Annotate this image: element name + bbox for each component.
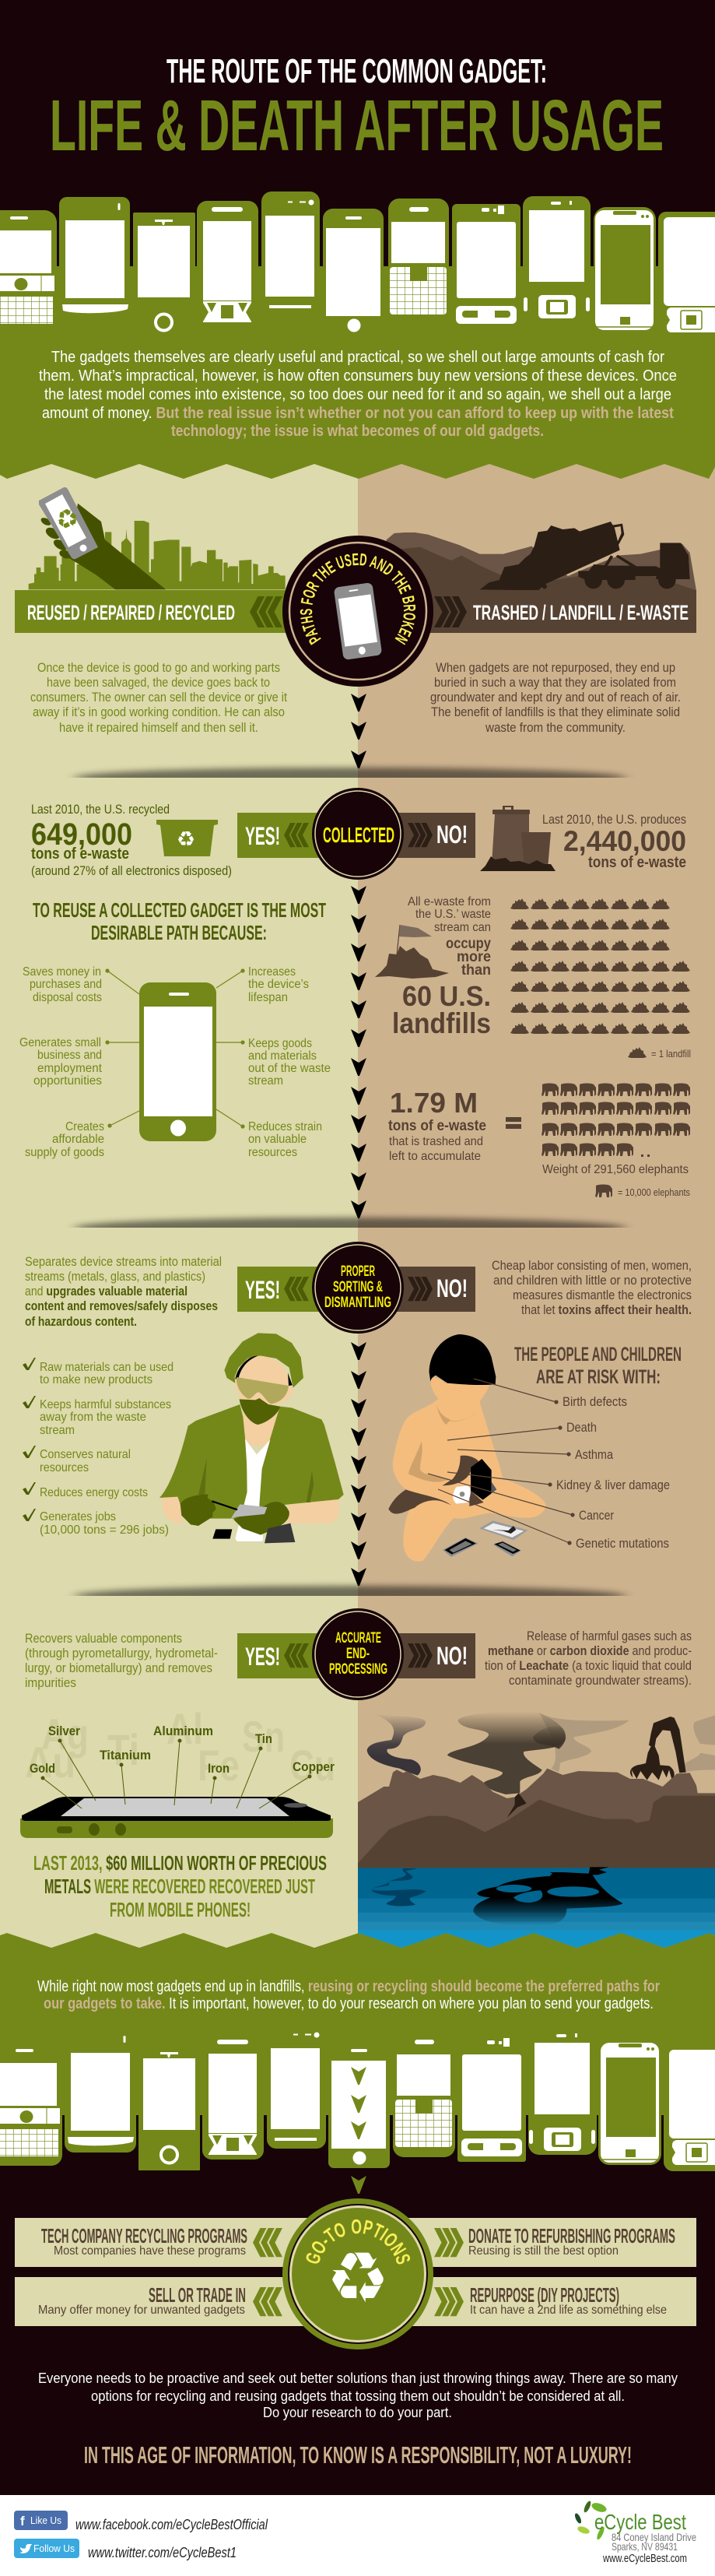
callouts: health risks: Kidney & liver damage <box>556 1478 670 1492</box>
option: sell or trade in <box>38 2283 246 2317</box>
benefit labels: purchases and <box>30 978 102 991</box>
twitter url: www.twitter.com/eCycleBest1 <box>88 2545 237 2560</box>
smoke reflection <box>371 1868 426 1906</box>
heading: people and children at risk: ARE AT RISK WITH: <box>536 1366 661 1388</box>
option: tech company recycling: TECH COMPANY RECYCLING PROGRAMS <box>41 2224 247 2247</box>
yes/no badge: proper sorting and dismantling: DISMANTLING <box>324 1295 391 1311</box>
text: reuse path description: Once the device is good to go and working parts <box>37 660 280 675</box>
heading: reuse is most desirable <box>33 898 326 944</box>
yes/no badge: collected: COLLECTED <box>323 823 394 847</box>
shadows under sections <box>74 768 626 1606</box>
pictogram: elephants <box>542 1084 690 1157</box>
arrow column <box>351 694 366 1586</box>
heading: people and children at risk <box>514 1344 682 1388</box>
faded element symbols: Al <box>166 1704 203 1753</box>
intro text: them. What’s impractical, however, is how often consumers buy new versions of these devices. Once <box>39 367 677 385</box>
diagram: metals in a phone <box>20 1724 335 1838</box>
text: reuse path description: have been salvaged, the device goes back to <box>47 675 270 690</box>
text: landfill capacity: than <box>461 962 491 979</box>
faded element symbols: Au <box>25 1738 75 1787</box>
facebook button: f <box>20 2514 25 2529</box>
icon: recycle bin <box>156 820 218 856</box>
checklist: benefits of proper sorting: Generates jobs <box>40 1510 116 1523</box>
metal labels: Titanium <box>100 1748 151 1762</box>
stat: produced: tons of e-waste <box>588 854 686 871</box>
benefit labels: stream <box>248 1074 283 1088</box>
callout: precious metals recovered: METALS WERE RECOVERED RECOVERED JUST <box>44 1875 315 1898</box>
benefit labels: Generates small <box>19 1036 101 1049</box>
text: proper sorting description: and upgrades valuable material <box>25 1284 188 1299</box>
panel: right tan column <box>358 459 715 1868</box>
text: landfill path description <box>430 660 681 735</box>
facebook button: Like Us <box>30 2514 61 2526</box>
icon: trash cans <box>480 806 556 871</box>
text: landfill capacity: more <box>457 949 491 965</box>
stat: recycled: 649,000 <box>31 817 132 852</box>
city skyline <box>16 521 286 589</box>
text: landfill path description: groundwater and kept dry and out of reach of air. <box>430 690 681 705</box>
text: landfill capacity: All e-waste from <box>408 895 491 908</box>
text: end-processing description: impurities <box>25 1675 76 1690</box>
intro text: the latest model comes into existence, so too does our need for it and so again, we shell out a large <box>44 386 671 403</box>
badge: go-to options: GO-TO OPTIONS <box>307 2219 411 2264</box>
icon: phone lying flat <box>20 1797 333 1838</box>
text: proper sorting description <box>25 1254 222 1329</box>
faded element symbols: Sn <box>242 1712 285 1761</box>
option: repurpose: It can have a 2nd life as something else <box>470 2304 667 2317</box>
top green band with phone row <box>0 192 715 479</box>
callout: precious metals recovered: LAST 2013, $60 MILLION WORTH OF PRECIOUS <box>33 1851 327 1875</box>
text: end-processing description: Recovers valuable components <box>25 1631 182 1646</box>
benefit labels: disposal costs <box>33 991 102 1004</box>
benefit labels: resources <box>248 1146 297 1159</box>
illustration: worker with protective gear <box>159 1333 344 1543</box>
legend: landfill <box>628 1047 691 1060</box>
checklist: benefits of proper sorting: to make new products <box>40 1373 152 1386</box>
equals sign <box>506 1117 521 1129</box>
benefit labels: Reduces strain <box>248 1120 322 1133</box>
text: end-processing description: lurgy, or biometallurgy) and removes <box>25 1661 212 1675</box>
yes/no badge: proper sorting and dismantling: PROPER <box>341 1263 375 1280</box>
checklist: benefits of proper sorting <box>23 1358 173 1537</box>
text: landfill path description: waste from the community. <box>485 720 626 735</box>
text: harmful gases description: tion of Leachate (a toxic liquid that could <box>485 1658 692 1673</box>
callouts: health risks: Death <box>566 1421 597 1435</box>
checklist: benefits of proper sorting: Conserves natural <box>40 1448 131 1461</box>
bottom phone screens and keys <box>0 2032 715 2165</box>
trashed path banner with landfill truck <box>358 522 696 633</box>
yes/no badge: proper sorting and dismantling <box>237 1242 475 1334</box>
text: proper sorting description: streams (metals, glass, and plastics) <box>25 1269 205 1284</box>
faded element symbols: Ti <box>107 1725 139 1774</box>
badge: paths for the used and the broken <box>282 536 433 687</box>
text: cheap labor description <box>492 1258 692 1317</box>
facebook button <box>14 2511 68 2530</box>
intro text: The gadgets themselves are clearly useful and practical, so we shell out large amounts of cash for <box>51 349 664 366</box>
metal labels: Aluminum <box>153 1724 213 1738</box>
benefit labels: affordable <box>52 1133 104 1146</box>
yes/no badge: accurate end-processing: NO! <box>436 1642 468 1670</box>
intro text: technology; the issue is what becomes of our old gadgets. <box>171 423 544 440</box>
connector lines <box>106 969 244 1128</box>
benefit labels: Keeps goods <box>248 1037 312 1050</box>
twitter button: Follow Us <box>33 2543 75 2554</box>
yes/no badge: collected: YES! <box>245 822 280 850</box>
yes/no badge: accurate end-processing: PROCESSING <box>329 1661 387 1678</box>
yes/no badge: accurate end-processing <box>237 1608 475 1700</box>
text: landfill capacity: the U.S.’ waste <box>415 908 491 921</box>
intro text <box>39 349 677 440</box>
callouts: health risks: Birth defects <box>563 1395 627 1409</box>
checklist: benefits of proper sorting: resources <box>40 1461 89 1474</box>
logo: www.eCycleBest.com <box>602 2552 687 2565</box>
logo: eCycle Best <box>594 2510 686 2534</box>
option: donate to refurbishing <box>468 2224 675 2258</box>
arrows into options <box>351 2067 366 2194</box>
checklist: benefits of proper sorting: Raw materials can be used <box>40 1361 173 1374</box>
caption: elephants: Weight of 291,560 elephants <box>542 1163 689 1176</box>
badge: paths for the used and the broken: PATHS FOR THE USED AND THE BROKEN <box>300 553 415 645</box>
benefit labels: opportunities <box>33 1074 102 1088</box>
closing text: Everyone needs to be proactive and seek out better solutions than just throwing things away. There are so many <box>38 2370 678 2386</box>
text: cheap labor description: that let toxins affect their health. <box>521 1302 692 1317</box>
yes/no badge: collected: NO! <box>436 821 468 849</box>
caption: elephants: = 10,000 elephants <box>618 1186 690 1198</box>
option: sell or trade in: Many offer money for unwanted gadgets <box>38 2304 245 2317</box>
faded element symbols: Fe <box>198 1741 240 1790</box>
stat: 1.79 M tons: that is trashed and <box>389 1135 483 1148</box>
chevrons <box>253 2228 464 2316</box>
text: harmful gases description <box>485 1629 692 1688</box>
text: cheap labor description: measures dismantle the electronics <box>513 1288 692 1302</box>
metal labels: Iron <box>208 1761 230 1776</box>
panel: left cream column <box>0 459 358 1950</box>
heading: reuse is most desirable: DESIRABLE PATH BECAUSE: <box>91 921 267 944</box>
faded element symbols: Cu <box>289 1741 335 1790</box>
caption: elephants <box>542 1163 690 1198</box>
benefit labels: the device’s <box>248 978 309 991</box>
text: reuse path description: have it repaired himself and then sell it. <box>59 720 258 735</box>
pictogram: 60 landfills <box>510 898 690 1034</box>
checklist: benefits of proper sorting: Keeps harmful substances <box>40 1398 171 1411</box>
yes/no badge: accurate end-processing: YES! <box>245 1643 280 1671</box>
benefit labels: supply of goods <box>25 1146 104 1159</box>
benefit labels: employment <box>37 1062 103 1075</box>
icon: phone <box>334 582 382 660</box>
callouts: health risks: Genetic mutations <box>576 1537 669 1551</box>
stat: recycled: tons of e-waste <box>31 845 129 863</box>
text: end-processing description <box>25 1631 218 1690</box>
option: tech company recycling <box>41 2224 247 2258</box>
stat: 1.79 M tons: left to accumulate <box>389 1150 481 1163</box>
checklist: benefits of proper sorting: stream <box>40 1424 75 1437</box>
water <box>358 1868 715 1949</box>
text: reuse path description: away if it’s in good working condition. He can also <box>33 705 285 719</box>
skull reflection <box>473 1867 623 1926</box>
options panels <box>15 2218 696 2326</box>
text: landfill path description: buried in such a way that they are isolated from <box>434 675 676 690</box>
text: proper sorting description: of hazardous content. <box>25 1314 137 1329</box>
option: repurpose <box>470 2283 667 2317</box>
yes/no badge: collected <box>237 788 475 880</box>
icon: phone <box>139 982 216 1141</box>
benefit labels: Saves money in <box>23 965 101 979</box>
stat: recycled: (around 27% of all electronics disposed) <box>31 863 232 878</box>
yes/no badge: proper sorting and dismantling: YES! <box>245 1276 280 1304</box>
text: closing message on band <box>37 1978 660 2012</box>
heading: reuse is most desirable: TO REUSE A COLLECTED GADGET IS THE MOST <box>33 898 326 922</box>
text: landfill capacity <box>392 895 491 1039</box>
stat: 1.79 M tons: 1.79 M <box>390 1087 478 1119</box>
text: landfill capacity: occupy <box>446 936 491 952</box>
footer <box>0 2495 715 2576</box>
stat: produced: Last 2010, the U.S. produces <box>542 813 686 827</box>
badge: go-to options <box>282 2198 433 2349</box>
arrows right <box>434 596 467 627</box>
recycled path banner with city skyline <box>15 487 292 633</box>
text: cheap labor description: and children with little or no protective <box>493 1273 692 1288</box>
facebook url: www.facebook.com/eCycleBestOfficial <box>75 2517 268 2532</box>
callouts: health risks: Cancer <box>579 1509 614 1523</box>
illustration: polluted landfill scene <box>358 1712 715 1949</box>
option: donate to refurbishing: Reusing is still the best option <box>468 2244 619 2258</box>
faded element symbols <box>25 1704 335 1790</box>
metal labels: Copper <box>293 1759 335 1774</box>
benefit labels: lifespan <box>248 991 288 1004</box>
option: sell or trade in: SELL OR TRADE IN <box>149 2283 246 2307</box>
bottom phone row <box>0 2032 715 2171</box>
text: landfill capacity: 60 U.S. <box>402 980 491 1012</box>
text: landfill capacity: landfills <box>392 1007 491 1039</box>
stat: produced: 2,440,000 <box>563 825 686 857</box>
benefit labels: Increases <box>248 965 296 979</box>
checklist: benefits of proper sorting: away from the waste <box>40 1411 146 1424</box>
metal labels <box>30 1724 335 1776</box>
text: end-processing description: (through pyrometallurgy, hydrometal- <box>25 1646 218 1661</box>
stat: 1.79 M tons <box>388 1087 486 1163</box>
callout: precious metals recovered: FROM MOBILE PHONES! <box>110 1898 251 1921</box>
logo <box>573 2500 696 2565</box>
text: reuse path description <box>30 660 287 735</box>
icon: flag on pile <box>375 925 449 979</box>
checklist: benefits of proper sorting: (10,000 tons = 296 jobs) <box>40 1523 169 1537</box>
closing text: Do your research to do your part. <box>263 2405 452 2420</box>
yes/no badge: proper sorting and dismantling: NO! <box>436 1274 468 1302</box>
bottom green band <box>0 1933 715 2115</box>
stat: recycled <box>31 803 232 878</box>
text: proper sorting description: content and removes/safely disposes <box>25 1299 218 1313</box>
faded element symbols: Ag <box>41 1710 89 1759</box>
arrows left <box>250 596 282 627</box>
benefit labels: out of the waste <box>248 1062 331 1075</box>
metal labels: Silver <box>48 1724 80 1738</box>
text: landfill path description: The benefit of landfills is that they eliminate solid <box>431 705 680 719</box>
twitter button <box>14 2539 79 2558</box>
yes/no badge: proper sorting and dismantling: SORTING & <box>333 1279 383 1295</box>
illustration: child dismantling devices <box>388 1334 546 1562</box>
legend: landfill: = 1 landfill <box>651 1048 691 1060</box>
icon: recycle: ♻ <box>327 2237 389 2319</box>
logo: Sparks, NV 89431 <box>612 2540 678 2553</box>
stat: produced <box>542 813 686 871</box>
title <box>50 52 664 166</box>
text: reuse path description: consumers. The owner can sell the device or give it <box>30 690 287 705</box>
stat: recycled: Last 2010, the U.S. recycled <box>31 803 170 817</box>
callouts: health risks <box>428 1379 670 1551</box>
yes/no badge: accurate end-processing: END- <box>346 1646 370 1662</box>
top phone screens and keys <box>0 199 715 332</box>
benefit labels: Creates <box>65 1120 104 1133</box>
yes/no badge: accurate end-processing: ACCURATE <box>335 1630 381 1646</box>
callout: precious metals recovered <box>33 1851 327 1921</box>
benefit labels: and materials <box>248 1049 317 1063</box>
closing text <box>38 2370 678 2420</box>
benefit labels <box>19 965 331 1159</box>
text: harmful gases description: contaminate groundwater streams). <box>509 1673 692 1688</box>
stat: 1.79 M tons: tons of e-waste <box>388 1118 486 1134</box>
icon: recycle bin: ♻ <box>177 828 195 852</box>
hand holding phone <box>39 487 166 589</box>
callouts: health risks: Asthma <box>575 1448 614 1462</box>
checklist: benefits of proper sorting: Reduces energy costs <box>40 1486 148 1499</box>
metal labels: Tin <box>255 1731 272 1746</box>
text: landfill path description: When gadgets are not repurposed, they end up <box>436 660 675 675</box>
text: proper sorting description: Separates device streams into material <box>25 1254 222 1269</box>
closing text: options for recycling and reusing gadgets that tossing them out shouldn’t be considered at all. <box>91 2388 625 2404</box>
text: harmful gases description: methane or carbon dioxide and produc- <box>488 1643 692 1658</box>
diagram: phone with benefits <box>19 965 331 1159</box>
benefit labels: business and <box>37 1049 102 1062</box>
text: landfill capacity: stream can <box>434 921 491 934</box>
metal pointers <box>41 1739 311 1808</box>
benefit labels: on valuable <box>248 1133 307 1146</box>
metal labels: Gold <box>30 1761 55 1776</box>
reused label: REUSED / REPAIRED / RECYCLED <box>27 601 235 624</box>
hand holding phone: ♻ <box>51 501 84 538</box>
option: tech company recycling: Most companies have these programs <box>54 2244 246 2258</box>
